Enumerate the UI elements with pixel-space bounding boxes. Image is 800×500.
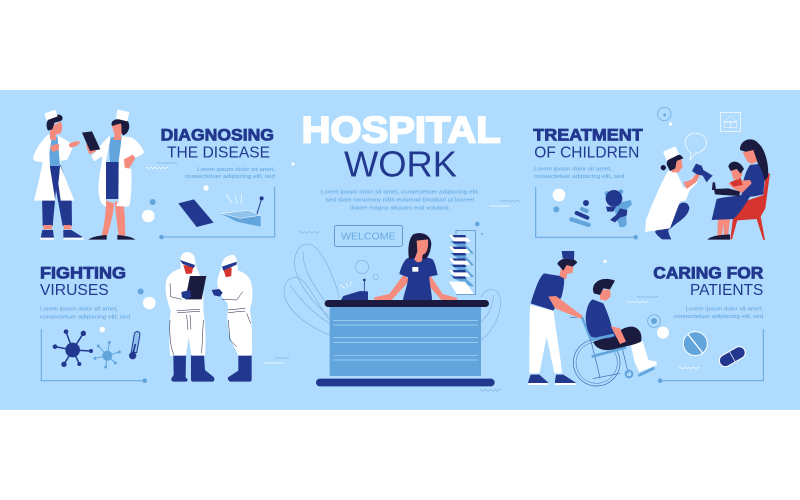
virus large — [53, 329, 93, 367]
welcome sign — [334, 225, 402, 246]
thermometer — [129, 332, 140, 359]
heading: diagnosing: DIAGNOSING — [161, 127, 274, 145]
intro text: dolore magna aliquam erat volutpat. — [350, 206, 450, 212]
mother and child — [707, 139, 770, 240]
intro text — [321, 190, 479, 212]
text: treatment body: consectetuer adipiscing elit, sed — [534, 174, 624, 180]
illustration: doctor with child and mother — [553, 107, 770, 240]
circle mark — [658, 107, 672, 126]
decorative dots — [299, 222, 501, 391]
panel: reception — [284, 222, 501, 391]
panel: caring for patients — [528, 251, 764, 386]
doctor — [645, 146, 700, 239]
chart axis: viruses — [41, 329, 147, 383]
icon: toy house — [720, 112, 741, 131]
text: diagnosing body: consectetuer adipiscing elit, sed — [185, 174, 275, 180]
text: diagnosing body — [185, 167, 276, 180]
text: treatment body: Lorem ipsum dolor sit amet, — [534, 166, 612, 172]
title: HOSPITAL — [302, 110, 501, 151]
heading: caring: PATIENTS — [690, 282, 763, 299]
blue background band — [0, 90, 800, 410]
heading: fighting — [40, 264, 126, 299]
chart axis: diagnosing — [159, 187, 275, 239]
heading: caring — [653, 264, 764, 299]
receptionist — [374, 233, 457, 300]
heading: diagnosing — [161, 127, 274, 162]
panel: fighting viruses — [40, 252, 289, 383]
decorative marks centre — [292, 162, 520, 207]
brochure rack — [449, 231, 475, 295]
text: caring body: consectetuer adipiscing elit, sed — [674, 314, 763, 320]
decorative circles — [142, 162, 209, 222]
female doctor — [82, 109, 144, 240]
chart axis: treatment — [536, 187, 638, 240]
leaves outline — [284, 244, 500, 341]
heading: treatment: OF CHILDREN — [534, 145, 639, 162]
teddy toy — [692, 164, 713, 182]
icon: viruses and thermometer — [53, 329, 140, 368]
wheelchair — [570, 317, 654, 386]
welcome sign: WELCOME — [341, 231, 396, 242]
toy pyramid — [571, 200, 589, 225]
decorative circles — [100, 288, 289, 364]
text: fighting body: Lorem ipsum dolor sit amet, — [40, 307, 119, 313]
person two — [212, 255, 252, 382]
panel: treatment of children — [533, 107, 770, 240]
text: fighting body — [40, 307, 130, 320]
heading: fighting: FIGHTING — [40, 264, 126, 282]
heading: treatment — [533, 127, 643, 162]
male doctor — [33, 110, 84, 240]
patient — [586, 279, 657, 372]
heading: caring: CARING FOR — [653, 264, 764, 282]
text: treatment body — [534, 166, 624, 180]
text: caring body: Lorem ipsum dolor sit amet, — [686, 306, 764, 312]
heading: fighting: VIRUSES — [40, 282, 109, 299]
speech bubble — [685, 133, 707, 160]
illustration: two doctors — [33, 109, 144, 240]
intro text: sed diam nonummy nibh euismod tincidunt ut laoreet — [326, 198, 475, 204]
icon: clipboard and device — [178, 194, 264, 227]
desk phone — [340, 279, 368, 300]
chart axis: caring — [658, 329, 763, 383]
illustration: two people in protective suits — [166, 252, 252, 382]
virus small — [93, 341, 121, 368]
intro text: Lorem ipsum dolor sit amet, consectetuer adipiscing elit, — [321, 190, 479, 196]
heading: treatment: TREATMENT — [533, 127, 643, 145]
text: diagnosing body: Lorem ipsum dolor sit amet, — [197, 167, 276, 173]
icon: pill — [683, 332, 707, 356]
heading: diagnosing: THE DISEASE — [167, 145, 270, 162]
text: caring body — [674, 306, 764, 320]
reception desk — [316, 300, 495, 386]
icon: capsule — [717, 344, 747, 369]
panel: diagnosing the disease — [33, 109, 276, 240]
title — [302, 110, 501, 185]
teddy bear — [605, 189, 632, 227]
text: fighting body: consectetuer adipiscing elit, sed — [40, 314, 130, 320]
person one — [166, 252, 214, 382]
illustration: nurse and patient in wheelchair — [528, 251, 747, 386]
title: WORK — [344, 144, 457, 185]
nurse — [528, 251, 583, 385]
